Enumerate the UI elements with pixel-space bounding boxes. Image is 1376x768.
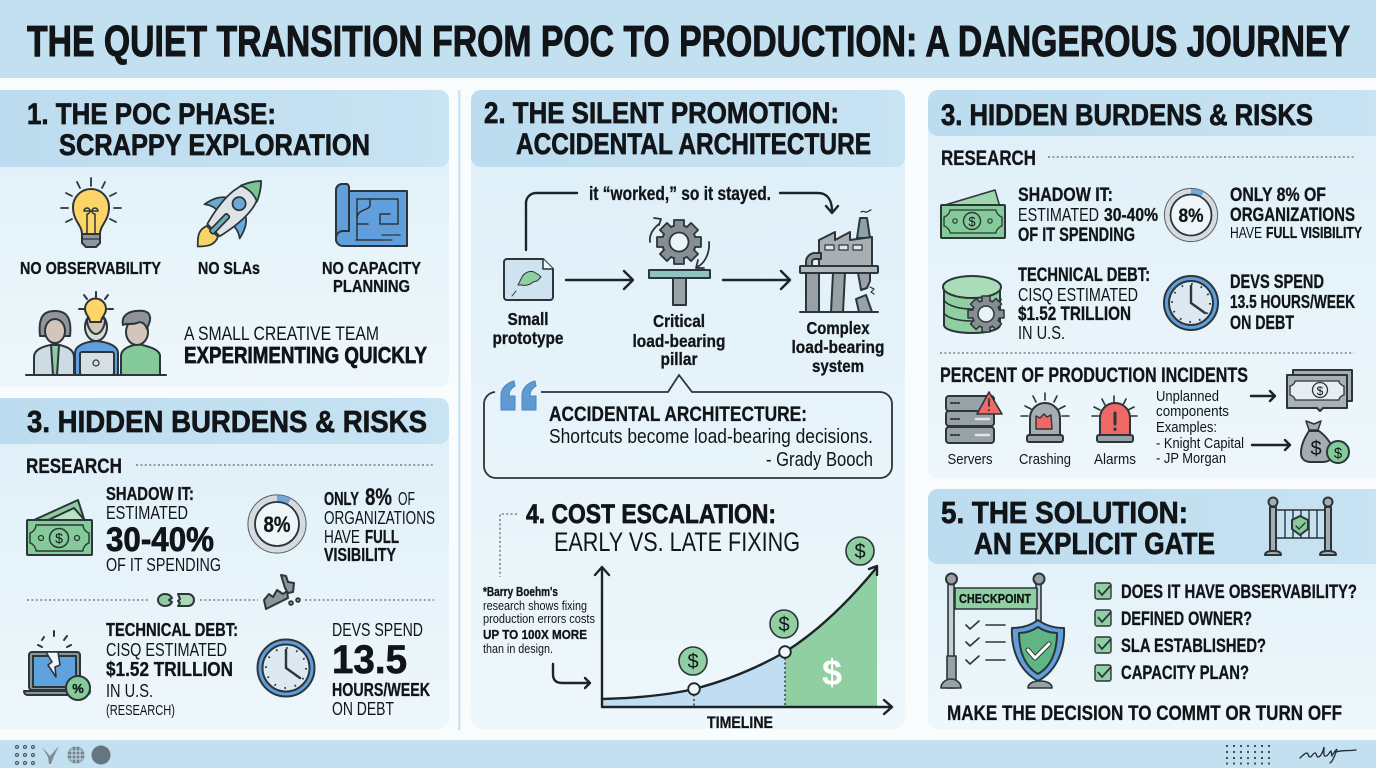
note: Barry Boehm research: production errors costs bbox=[483, 612, 595, 626]
label: no capacity planning: PLANNING bbox=[333, 276, 410, 296]
text: only 8 percent: 8% bbox=[365, 484, 392, 511]
heading: POC phase bbox=[27, 98, 370, 162]
decorative dot matrix bbox=[1226, 746, 1273, 764]
text: technical debt: CISQ ESTIMATED bbox=[106, 640, 227, 660]
label: small prototype: prototype bbox=[492, 328, 564, 348]
text: devs spend: DEVS SPEND bbox=[332, 620, 423, 640]
label: servers: Servers bbox=[948, 451, 992, 468]
arrow: it worked so it stayed: it “worked,” so it stayed. bbox=[589, 184, 771, 205]
label: no observability: NO OBSERVABILITY bbox=[20, 258, 161, 278]
text: technical debt bbox=[106, 620, 238, 719]
icon: database with gear bbox=[943, 276, 1004, 333]
text: technical debt: IN U.S. bbox=[106, 681, 153, 701]
arrow: pillar to system bbox=[723, 271, 790, 289]
checklist item: owner bbox=[1095, 609, 1252, 630]
heading: silent promotion: ACCIDENTAL ARCHITECTURE bbox=[516, 128, 871, 161]
icon: banknotes bbox=[27, 500, 92, 555]
panel: 1 the POC phase bbox=[0, 90, 449, 387]
label: critical pillar: Critical bbox=[653, 311, 705, 331]
icon: small team bbox=[26, 292, 166, 375]
text: shadow IT: ESTIMATED bbox=[1018, 205, 1099, 225]
text: unplanned components: components bbox=[1156, 403, 1229, 420]
icon: money bag bbox=[1301, 421, 1349, 463]
icon: dollar coin low: $ bbox=[687, 651, 699, 673]
panel: hidden burdens left bbox=[0, 398, 449, 729]
chart: cost escalation curve bbox=[595, 537, 892, 732]
text: only 8 percent: HAVE bbox=[324, 527, 360, 547]
arrow: to money bag bbox=[1252, 440, 1290, 450]
icon: clock bbox=[1164, 276, 1218, 330]
arrow: prototype to pillar bbox=[566, 271, 633, 289]
icon: quote marks bbox=[501, 381, 536, 410]
note: Barry Boehm research: UP TO 100X MORE bbox=[483, 627, 587, 642]
icon: banknote stack bbox=[1287, 370, 1352, 411]
heading: percent of production incidents: PERCENT OF PRODUCTION INCIDENTS bbox=[940, 364, 1248, 387]
text: technical debt: TECHNICAL DEBT: bbox=[1018, 265, 1150, 286]
label: critical pillar bbox=[632, 311, 726, 369]
heading: POC phase: 1. THE POC PHASE: bbox=[27, 98, 276, 131]
icon: servers with warning bbox=[946, 392, 1002, 443]
heading: POC phase: SCRAPPY EXPLORATION bbox=[59, 129, 370, 162]
label: no capacity planning bbox=[322, 258, 421, 296]
text: shadow IT: OF IT SPENDING bbox=[1018, 225, 1135, 246]
icon: broken laptop bbox=[24, 631, 90, 700]
label: small prototype: Small bbox=[508, 309, 548, 329]
label: alarms: Alarms bbox=[1094, 451, 1136, 468]
checklist item: capacity plan: CAPACITY PLAN? bbox=[1121, 663, 1249, 684]
panel: hidden burdens right bbox=[928, 90, 1376, 478]
icon: rubble bbox=[264, 575, 300, 609]
text: only 8 percent: ONLY 8% OF bbox=[1230, 185, 1326, 206]
text: technical debt: TECHNICAL DEBT: bbox=[106, 620, 238, 640]
icon: banknotes: $ bbox=[55, 530, 63, 546]
icon: money bag: $ bbox=[1334, 445, 1343, 462]
label: complex system: Complex bbox=[806, 318, 870, 338]
icon: checkpoint gate with shield: CHECKPOINT bbox=[959, 591, 1031, 606]
chart: cost escalation curve: $ bbox=[822, 652, 842, 693]
icon: dollar coin high bbox=[846, 537, 874, 565]
checklist item: SLA: SLA ESTABLISHED? bbox=[1121, 636, 1266, 657]
icon: dollar coin low bbox=[679, 647, 707, 675]
text: only 8 percent: ONLY bbox=[324, 489, 359, 509]
text: devs spend: DEVS SPEND bbox=[1230, 272, 1324, 293]
text: shadow IT: SHADOW IT: bbox=[106, 484, 194, 504]
text: unplanned components: - JP Morgan bbox=[1156, 450, 1226, 467]
icon: banknotes: $ bbox=[968, 214, 976, 229]
label: complex system bbox=[792, 318, 884, 376]
text: technical debt: IN U.S. bbox=[1018, 323, 1065, 343]
text: small creative team: EXPERIMENTING QUICKLY bbox=[184, 342, 427, 368]
logo: emblem bbox=[67, 746, 85, 764]
text: unplanned components: Examples: bbox=[1156, 419, 1217, 436]
icon: dot grid bbox=[16, 746, 34, 764]
arrow: it worked so it stayed bbox=[526, 184, 838, 250]
note: Barry Boehm research: research shows fixing bbox=[483, 599, 587, 613]
heading: the solution: 5. THE SOLUTION: bbox=[941, 496, 1188, 530]
icon: dollar coin mid bbox=[770, 610, 798, 638]
text: shadow IT: 30-40% bbox=[106, 521, 214, 559]
text: technical debt: $1.52 TRILLION bbox=[1018, 304, 1131, 325]
heading: the solution: AN EXPLICIT GATE bbox=[974, 527, 1215, 561]
text: technical debt: CISQ ESTIMATED bbox=[1018, 285, 1138, 305]
arrow: to banknote bbox=[1251, 391, 1275, 401]
text: only 8 percent: VISIBILITY bbox=[324, 545, 396, 565]
text: shadow IT: SHADOW IT: bbox=[1018, 185, 1113, 206]
text: only 8 percent: FULL bbox=[365, 527, 399, 547]
panel: silent promotion bbox=[471, 90, 905, 732]
text: shadow IT: ESTIMATED bbox=[106, 503, 188, 523]
note: Barry Boehm research: *Barry Boehm's bbox=[483, 585, 558, 599]
icon: gate bbox=[1265, 498, 1336, 555]
icon: rocket bbox=[180, 164, 279, 264]
icon: banknotes bbox=[941, 190, 1005, 238]
icon: blueprint bbox=[336, 184, 407, 246]
callout: accidental architecture quote bbox=[484, 375, 892, 478]
text: only 8 percent: OF bbox=[398, 489, 415, 509]
icon: alarm bbox=[1092, 396, 1137, 442]
icon: banknote stack: $ bbox=[1317, 384, 1324, 398]
callout: accidental architecture quote: ACCIDENTAL ARCHITECTURE: bbox=[549, 403, 807, 426]
text: only 8 percent bbox=[1230, 185, 1363, 242]
text: only 8 percent bbox=[324, 484, 435, 565]
icon: dollar coin high: $ bbox=[854, 541, 866, 563]
text: unplanned components: - Knight Capital bbox=[1156, 435, 1244, 452]
text: technical debt bbox=[1018, 265, 1150, 343]
heading: hidden burdens: 3. HIDDEN BURDENS & RISKS bbox=[27, 404, 427, 439]
label: crashing: Crashing bbox=[1019, 451, 1071, 468]
note: Barry Boehm research: than in design. bbox=[483, 642, 553, 656]
icon: clock bbox=[258, 640, 314, 696]
text: devs spend: HOURS/WEEK bbox=[332, 680, 430, 700]
heading: cost escalation: EARLY VS. LATE FIXING bbox=[554, 527, 800, 557]
label: no SLAs: NO SLAs bbox=[198, 258, 260, 278]
icon: broken laptop: % bbox=[72, 681, 84, 696]
label: complex system: load-bearing bbox=[792, 337, 884, 357]
icon: small prototype document bbox=[504, 259, 553, 300]
heading: silent promotion: 2. THE SILENT PROMOTION: bbox=[484, 97, 839, 130]
panel: the solution bbox=[928, 489, 1376, 729]
text: devs spend bbox=[1230, 272, 1355, 334]
text: only 8 percent: HAVE bbox=[1230, 225, 1262, 242]
text: devs spend: ON DEBT bbox=[1230, 313, 1294, 334]
footer band bbox=[0, 740, 1376, 768]
icon: crashing siren bbox=[1021, 393, 1069, 442]
text: unplanned components: Unplanned bbox=[1156, 388, 1219, 405]
label: critical pillar: load-bearing bbox=[632, 331, 726, 351]
chart: 8 percent donut bbox=[1164, 188, 1218, 242]
axis label: timeline: TIMELINE bbox=[707, 713, 773, 732]
text: unplanned components bbox=[1156, 388, 1244, 467]
subheading: research: RESEARCH bbox=[941, 147, 1036, 170]
icon: broken chain link bbox=[158, 594, 194, 606]
checklist item: SLA bbox=[1095, 636, 1266, 657]
subheading: research: RESEARCH bbox=[26, 455, 122, 478]
icon: light bulb bbox=[61, 178, 121, 247]
chart: 8 percent donut: 8% bbox=[264, 512, 290, 537]
text: small creative team bbox=[184, 323, 427, 368]
icon: dollar coin mid: $ bbox=[778, 614, 790, 636]
icon: gear on pillar bbox=[649, 218, 710, 305]
heading: silent promotion bbox=[484, 97, 871, 161]
icon: cracked factory bbox=[800, 210, 878, 312]
arrow: note to chart bbox=[553, 664, 590, 688]
checklist bbox=[1095, 582, 1357, 684]
text: technical debt: $1.52 TRILLION bbox=[106, 659, 233, 681]
note: Barry Boehm research bbox=[483, 585, 595, 656]
text: shadow IT bbox=[106, 484, 221, 575]
text: shadow IT: OF IT SPENDING bbox=[106, 555, 221, 575]
text: only 8 percent: ORGANIZATIONS bbox=[324, 508, 435, 528]
heading: hidden burdens: 3. HIDDEN BURDENS & RISKS bbox=[941, 99, 1313, 132]
callout: accidental architecture quote: Shortcuts become load-bearing decisions. bbox=[549, 426, 873, 448]
label: no capacity planning: NO CAPACITY bbox=[322, 258, 421, 278]
text: shadow IT: 30-40% bbox=[1104, 205, 1158, 225]
logo: globe bbox=[92, 746, 110, 764]
signature bbox=[1300, 747, 1356, 763]
label: critical pillar: pillar bbox=[660, 349, 698, 369]
checklist item: capacity plan bbox=[1095, 663, 1249, 684]
label: small prototype bbox=[492, 309, 564, 348]
text: devs spend bbox=[332, 620, 430, 719]
logo: wing bbox=[42, 746, 59, 764]
text: devs spend: ON DEBT bbox=[332, 699, 394, 719]
heading: the solution bbox=[941, 496, 1215, 561]
heading: cost escalation: 4. COST ESCALATION: bbox=[526, 499, 776, 529]
chart: 8 percent donut bbox=[248, 495, 306, 553]
title banner bbox=[0, 0, 1376, 78]
heading: cost escalation bbox=[526, 499, 800, 557]
chart: 8 percent donut: 8% bbox=[1178, 206, 1204, 227]
icon: money bag: $ bbox=[1310, 438, 1322, 460]
text: small creative team: A SMALL CREATIVE TEAM bbox=[184, 323, 379, 345]
text: technical debt: (RESEARCH) bbox=[106, 702, 175, 719]
callout: accidental architecture quote: - Grady Booch bbox=[766, 449, 873, 471]
text: shadow IT bbox=[1018, 185, 1158, 246]
text: devs spend: 13.5 bbox=[332, 638, 407, 682]
checklist item: owner: DEFINED OWNER? bbox=[1121, 609, 1252, 630]
icon: checkpoint gate with shield bbox=[941, 574, 1064, 688]
label: complex system: system bbox=[812, 356, 864, 376]
